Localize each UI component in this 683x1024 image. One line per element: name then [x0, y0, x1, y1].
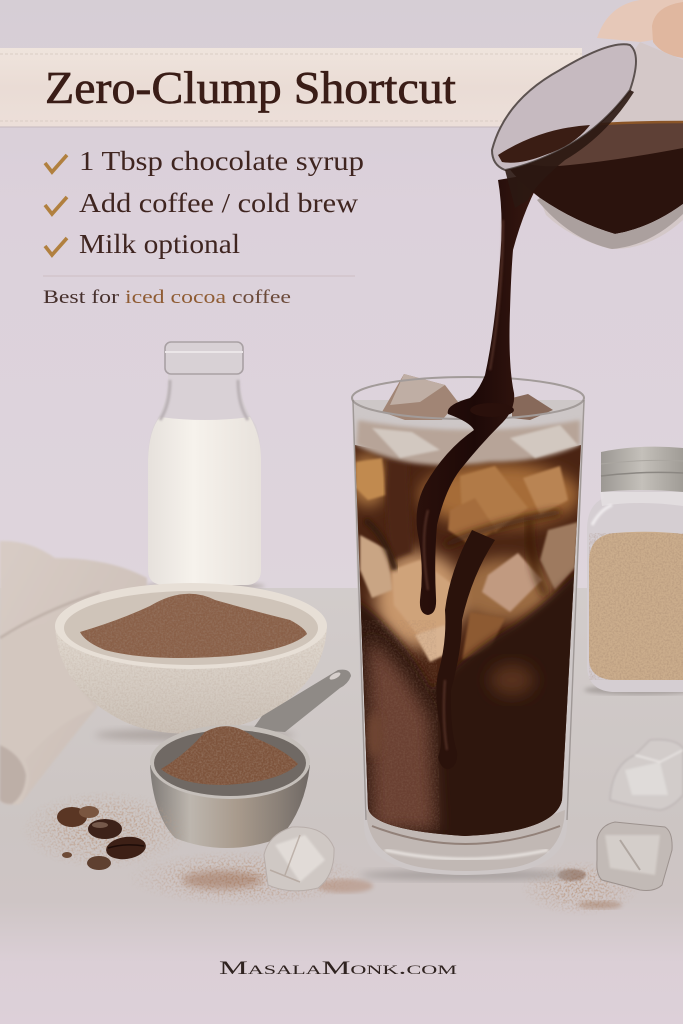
amber glow — [350, 454, 580, 648]
check item 1: 1 Tbsp chocolate syrup — [79, 146, 364, 176]
subtitle: Best for iced cocoa coffee — [43, 287, 291, 308]
coffee liquid — [355, 445, 581, 836]
glass body — [352, 400, 585, 875]
title: Zero-Clump Shortcut — [45, 62, 456, 113]
coffee beans — [57, 806, 147, 870]
checklist — [45, 146, 364, 259]
ice cube back right — [610, 740, 683, 810]
spilled powder — [20, 790, 640, 916]
dark veins — [386, 460, 412, 560]
background wall — [0, 0, 683, 600]
glass jug — [492, 0, 683, 249]
cocoa mound — [80, 594, 307, 658]
glass base — [366, 810, 565, 871]
sugar jar — [584, 447, 683, 695]
second drip — [436, 530, 495, 769]
main stream — [417, 172, 545, 615]
website footer: MasalaMonk.com — [219, 958, 458, 979]
syrup sheen — [424, 220, 503, 750]
milk bottle — [145, 342, 265, 590]
measuring scoop — [150, 670, 351, 848]
ice cubes in coffee — [356, 458, 578, 662]
ice cube front right — [597, 822, 672, 890]
left lighter coffee — [368, 640, 436, 830]
jug opening — [492, 44, 636, 170]
check item 2: Add coffee / cold brew — [79, 188, 359, 218]
table surface — [0, 588, 683, 1024]
floating ice above rim — [382, 374, 458, 420]
linen towel — [0, 541, 147, 805]
dark lower coffee — [360, 568, 574, 836]
scoop cocoa — [161, 726, 298, 785]
glass rim — [352, 377, 584, 419]
syrup pour — [417, 172, 545, 769]
jug body — [537, 42, 683, 249]
submerged cubes — [490, 664, 534, 696]
foam and top ice — [356, 420, 580, 465]
bowl of cocoa powder — [55, 583, 327, 741]
syrup in jug — [500, 122, 683, 234]
glass of iced coffee — [350, 374, 590, 880]
check item 3: Milk optional — [79, 229, 240, 259]
ice cube near scoop — [264, 827, 334, 891]
title banner — [0, 48, 582, 128]
hand — [597, 0, 683, 42]
